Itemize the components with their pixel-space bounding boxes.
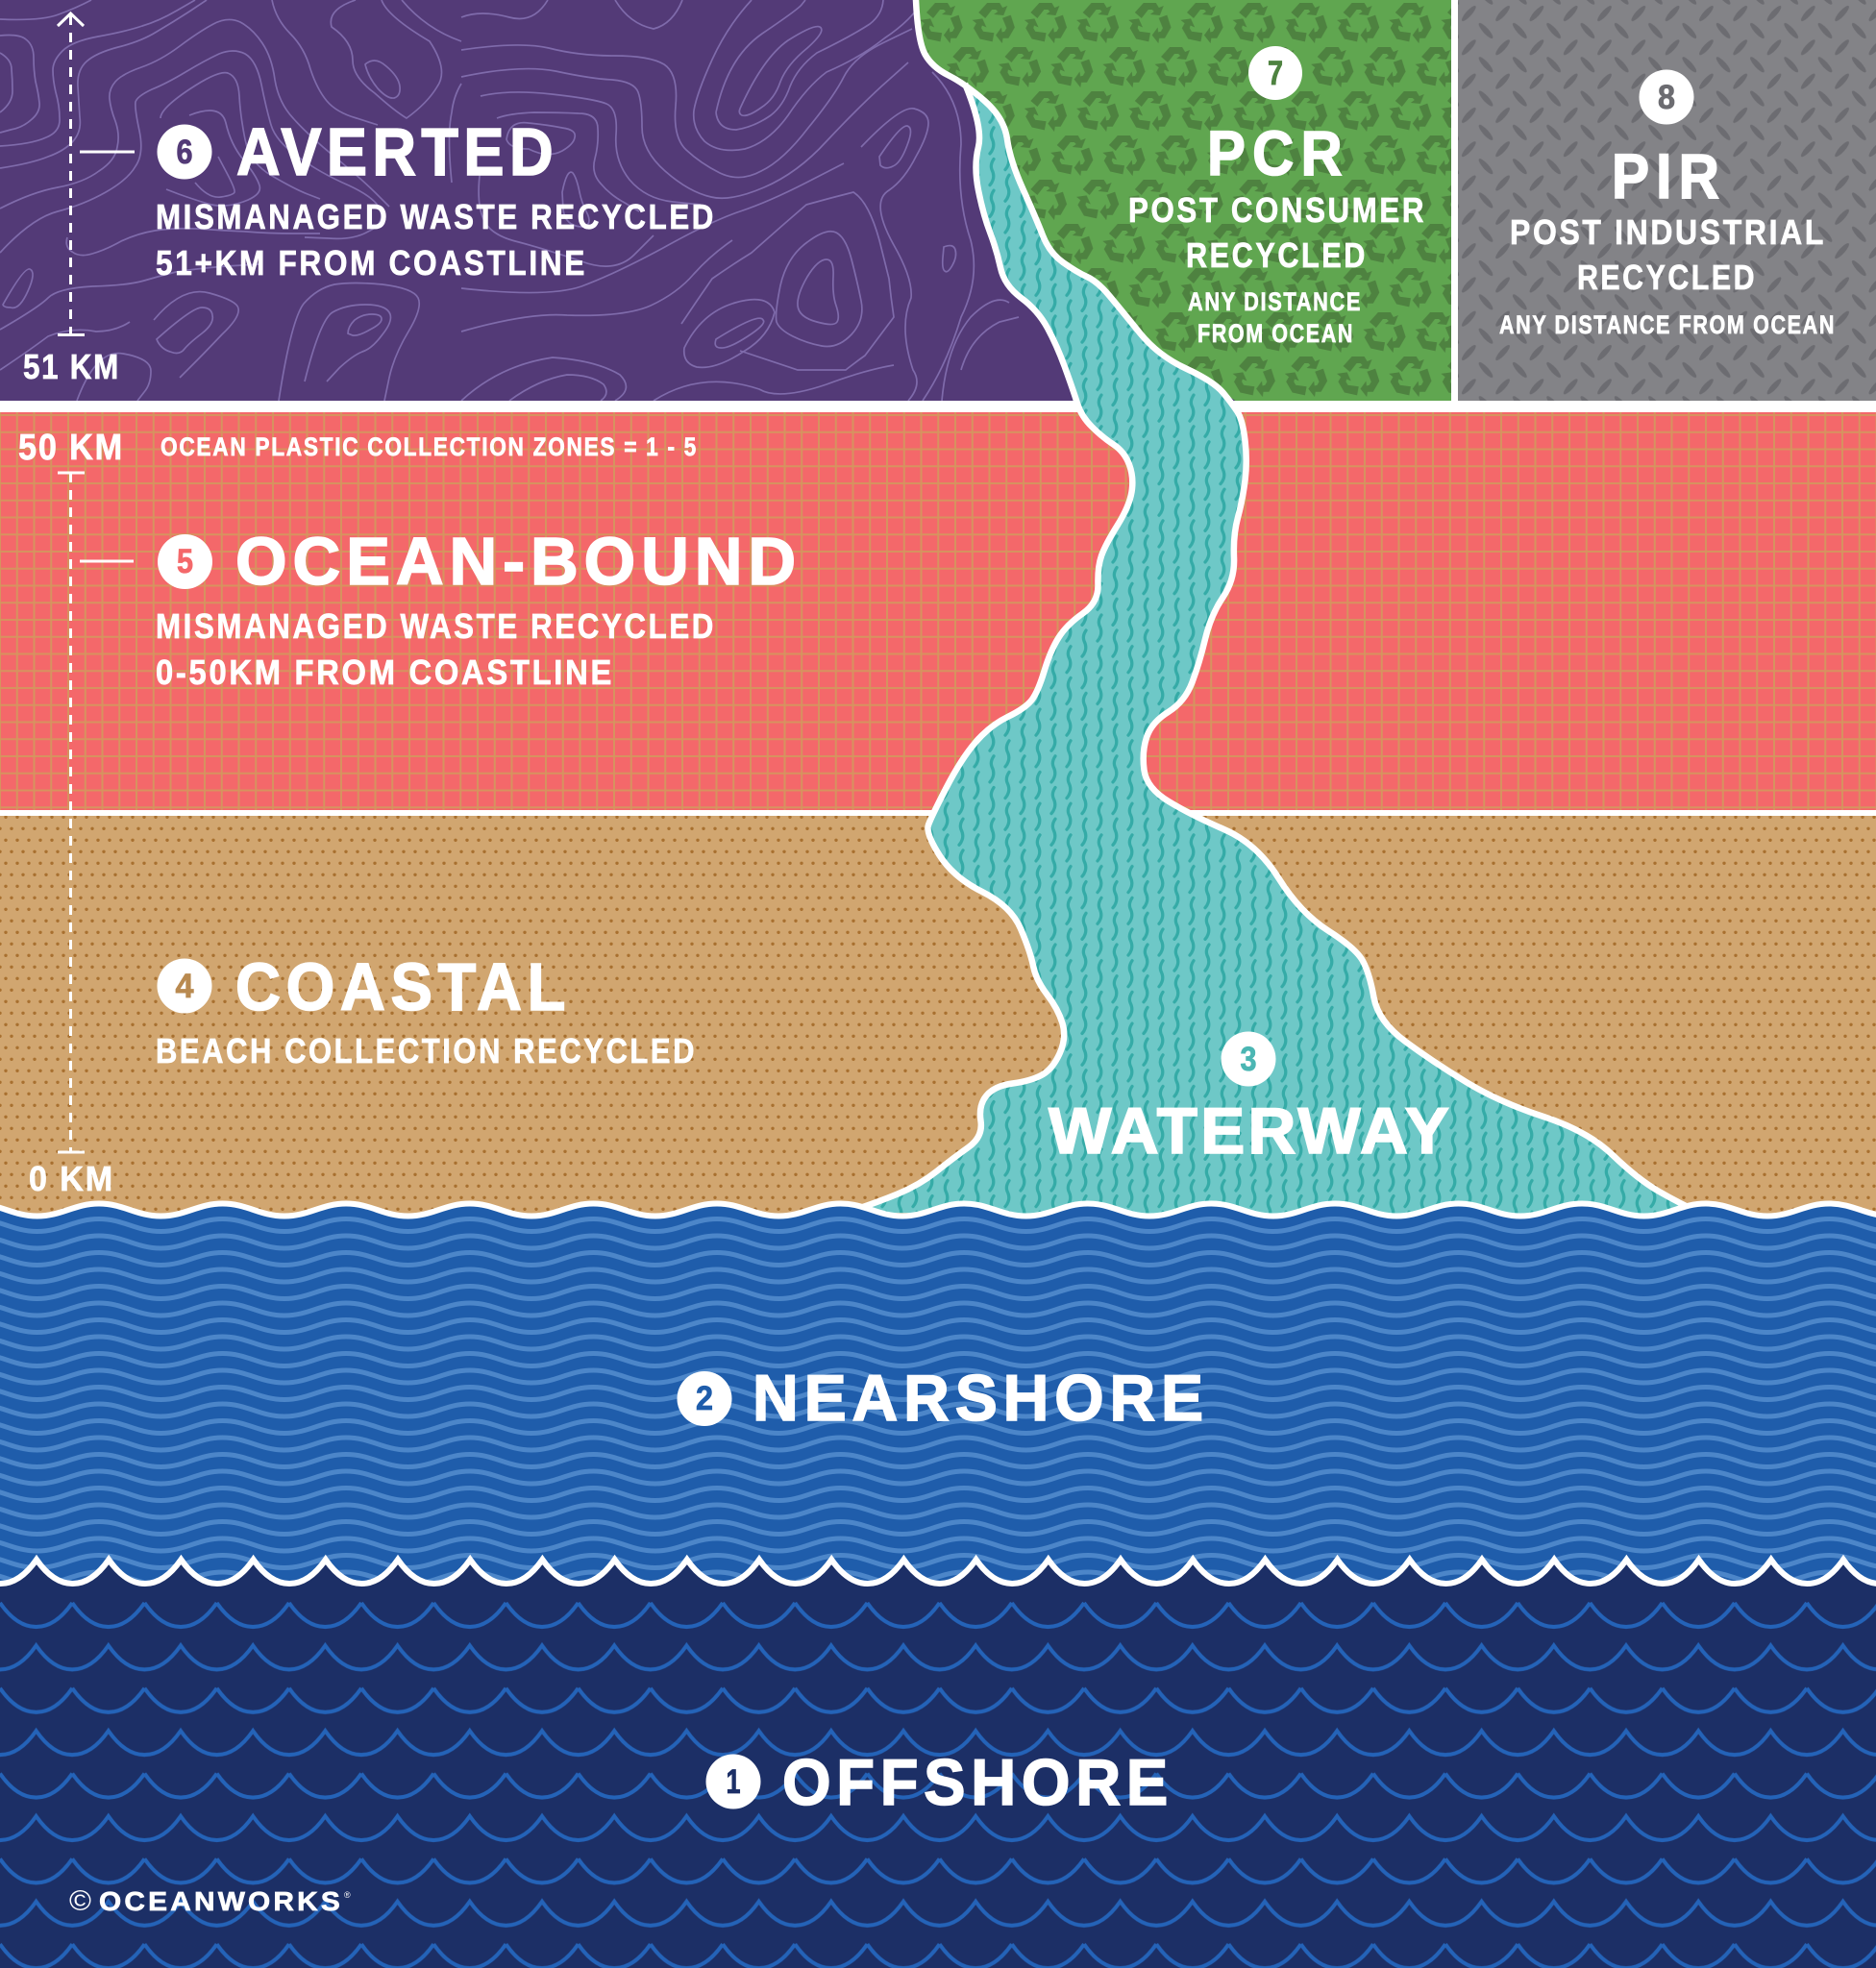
- distance scale: 51 km upward: [23, 13, 135, 386]
- subtitle: post industrial recycled: RECYCLED: [1577, 258, 1757, 297]
- number badge 4: 4: [175, 968, 194, 1005]
- panel: PIR zone 8: [1457, 0, 1876, 401]
- subtitle: post industrial recycled: [1510, 212, 1826, 297]
- caption: ocean plastic collection zones: OCEAN PLASTIC COLLECTION ZONES = 1 - 5: [160, 432, 698, 461]
- number badge 4: [158, 959, 211, 1013]
- brand: oceanworks copyright: ®: [344, 1890, 351, 1900]
- number badge 6: [158, 125, 211, 179]
- scalloped wave border: [0, 1560, 1876, 1584]
- panel: PCR zone 7: [913, 0, 1451, 404]
- label: 50 km: 50 KM: [18, 428, 124, 468]
- heading: waterway: WATERWAY: [1049, 1095, 1452, 1168]
- subtitle: mismanaged waste 51+km: [156, 197, 716, 283]
- subtitle: post consumer recycled: RECYCLED: [1186, 235, 1368, 275]
- number badge 6: 6: [177, 134, 192, 171]
- number badge 1: 1: [727, 1763, 740, 1801]
- label: 0 km: 0 KM: [29, 1159, 114, 1198]
- heading: PIR: PIR: [1612, 140, 1726, 211]
- heading: ocean-bound: OCEAN-BOUND: [235, 524, 802, 599]
- number badge 1: [705, 1755, 761, 1808]
- number badge 5: [158, 534, 212, 589]
- note: any distance from ocean: ANY DISTANCE: [1188, 287, 1362, 316]
- number badge 5: 5: [177, 543, 193, 580]
- subtitle: post consumer recycled: POST CONSUMER: [1128, 190, 1426, 230]
- number badge 2: 2: [696, 1380, 713, 1417]
- subtitle: mismanaged waste 0-50km: 0-50KM FROM COASTLINE: [156, 652, 614, 692]
- subtitle: mismanaged waste 51+km: MISMANAGED WASTE RECYCLED: [156, 197, 716, 236]
- heading: coastal: COASTAL: [235, 949, 571, 1024]
- heading: PCR: PCR: [1207, 117, 1349, 188]
- number badge 8: [1640, 69, 1693, 125]
- subtitle: beach collection recycled: BEACH COLLECTION RECYCLED: [156, 1031, 697, 1070]
- number badge 7: [1248, 46, 1302, 100]
- number badge 7: 7: [1268, 55, 1283, 92]
- subtitle: post industrial recycled: POST INDUSTRIAL: [1510, 212, 1826, 252]
- panel: nearshore zone 2: [0, 1203, 1876, 1595]
- panel: ocean-bound zone 5: [0, 412, 1876, 810]
- number badge 8: 8: [1658, 79, 1675, 116]
- topographic contour lines: [0, 0, 1019, 401]
- subtitle: mismanaged waste 51+km: 51+KM FROM COASTLINE: [156, 243, 587, 283]
- subtitle: post consumer recycled: [1128, 190, 1426, 275]
- note: any distance from ocean: [1188, 287, 1362, 348]
- number badge 3: [1221, 1032, 1276, 1086]
- heading: averted: AVERTED: [236, 114, 558, 189]
- heading: offshore: OFFSHORE: [782, 1746, 1173, 1819]
- subtitle: mismanaged waste 0-50km: MISMANAGED WASTE RECYCLED: [156, 606, 716, 646]
- panel: waterway zone 3: [846, 0, 1706, 1216]
- label: 51 km: 51 KM: [23, 347, 120, 386]
- number badge 3: 3: [1240, 1041, 1257, 1078]
- distance scale: 50 km to 0 km: [18, 428, 134, 1198]
- brand: oceanworks copyright: OCEANWORKS: [99, 1886, 343, 1916]
- heading: nearshore: NEARSHORE: [753, 1362, 1209, 1435]
- shoreline wave: [0, 1203, 1876, 1217]
- panel: coastal zone 4: [0, 816, 1876, 1229]
- subtitle: mismanaged waste 0-50km: [156, 606, 716, 692]
- panel: averted zone 6: [0, 0, 1876, 401]
- note: any distance from ocean: FROM OCEAN: [1197, 319, 1354, 348]
- panel: offshore zone 1: [0, 1560, 1876, 1968]
- brand: oceanworks copyright: ©: [69, 1885, 91, 1917]
- number badge 2: [677, 1371, 732, 1426]
